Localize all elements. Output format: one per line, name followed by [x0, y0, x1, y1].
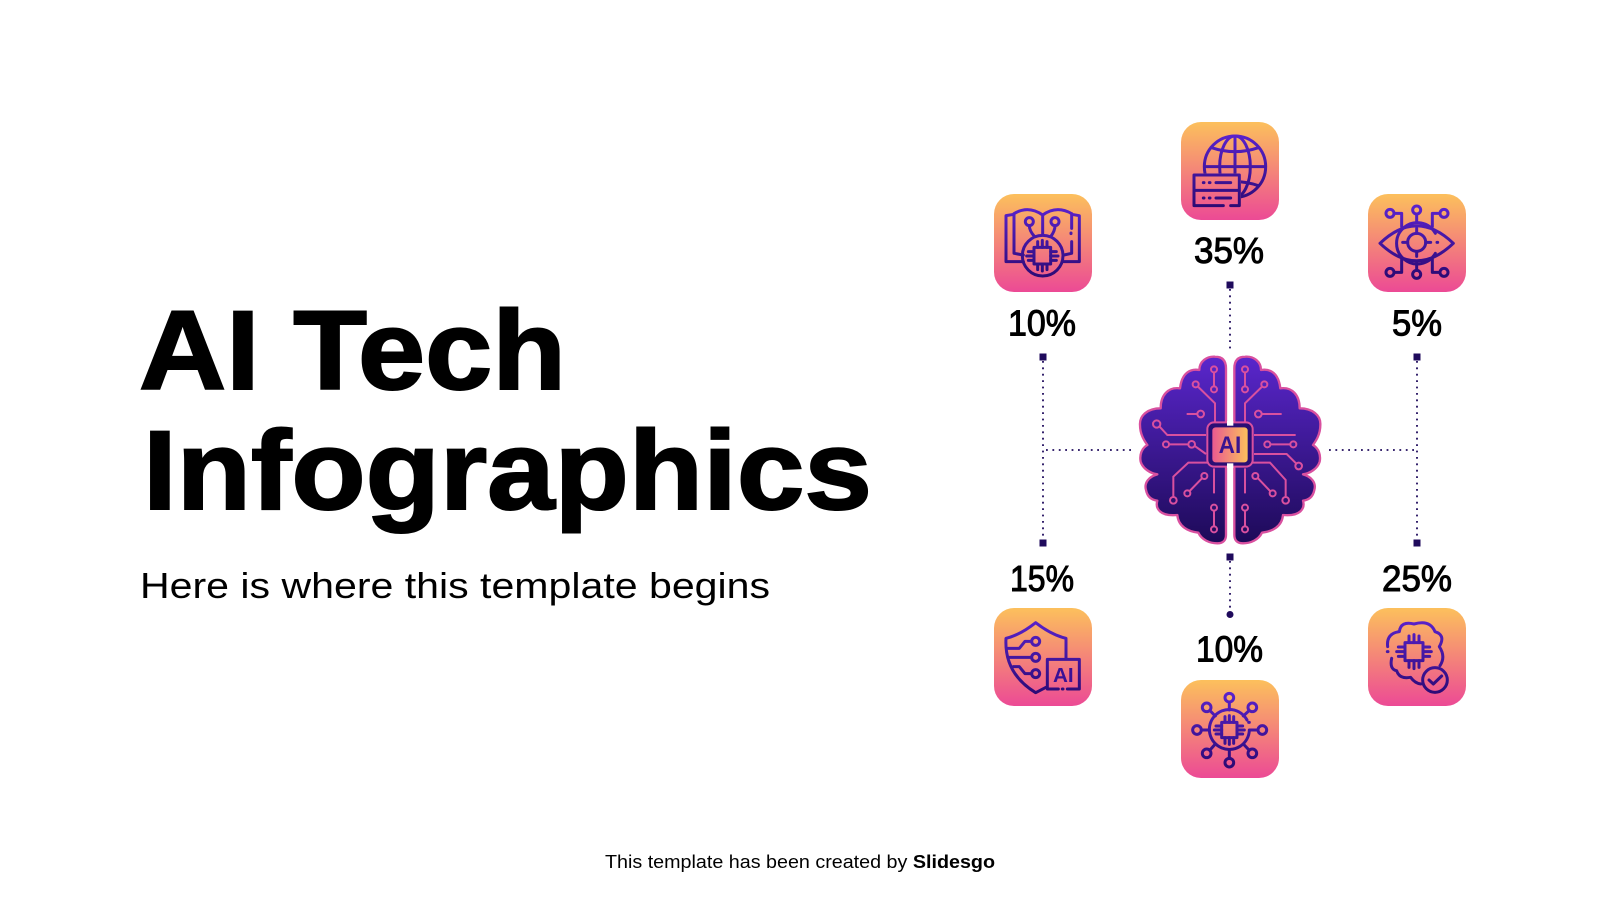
tile: eye: [1368, 194, 1466, 292]
title: AI Tech: [139, 288, 566, 413]
title: Infographics: [143, 408, 872, 533]
icon: AI shield: AI: [1053, 664, 1074, 687]
tile: network chip: [1181, 680, 1279, 778]
AI chip: [1207, 421, 1253, 468]
circuit traces: [1153, 366, 1302, 532]
tile: book with chip: [994, 194, 1092, 292]
subtitle: Here is where this template begins: [140, 565, 770, 606]
percentage 25%: 25%: [1382, 558, 1452, 599]
AI chip: AI: [1219, 432, 1241, 459]
percentage 10% top left: 10%: [1008, 302, 1076, 344]
percentage 15%: 15%: [1010, 558, 1074, 599]
tile: globe and server: [1181, 122, 1279, 220]
footer credit: This template has been created by Slidesgo: [605, 851, 995, 872]
icon: chip network: [1193, 693, 1267, 767]
icon: globe with server: [1194, 136, 1266, 206]
icon: open book with chip: [1006, 210, 1079, 276]
connector lines: [1040, 282, 1420, 618]
icon: circuit eye: [1380, 206, 1453, 278]
central AI brain: [1140, 357, 1320, 543]
percentage 5%: 5%: [1392, 302, 1442, 344]
left hemisphere: [1140, 357, 1226, 543]
title: [139, 288, 872, 533]
percentage 10% bottom: 10%: [1196, 628, 1263, 670]
right hemisphere: [1234, 357, 1320, 543]
infographic slide: [140, 122, 1466, 872]
percentage 35%: 35%: [1194, 230, 1264, 271]
icon: brain chip with check: [1387, 623, 1447, 692]
tile: brain chip: [1368, 608, 1466, 706]
tile: shield: [994, 608, 1092, 706]
